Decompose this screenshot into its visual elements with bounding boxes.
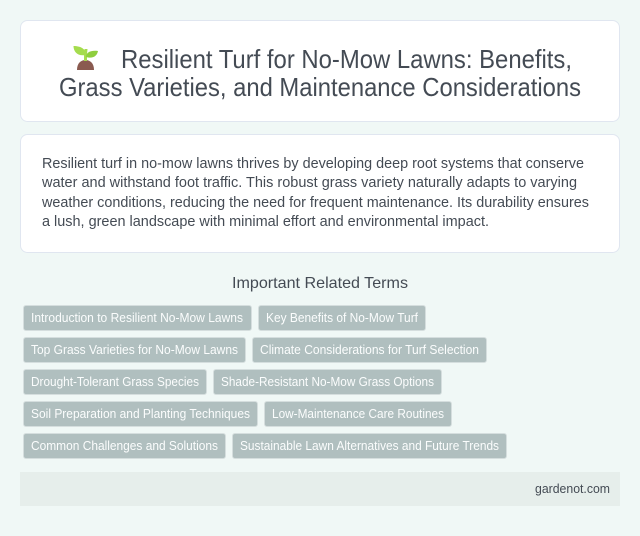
tag [258,306,426,330]
text block: description: weather conditions, reducing the need for frequent maintenance. Its durability ensures [41,194,589,211]
text block: description: Resilient turf in no-mow lawns thrives by developing deep root systems that conserve [42,155,584,172]
tag [264,402,452,426]
tag list [24,306,506,458]
text block: description: water and withstand foot traffic. This robust grass variety naturally adapts to varying [41,174,577,191]
tag [24,338,246,362]
tag [24,434,226,458]
tag: Shade-Resistant No-Mow Grass Options [221,375,434,389]
tag [214,370,442,394]
panel: title card [20,20,620,122]
tag [232,434,506,458]
title: Grass Varieties, and Maintenance Considerations [59,72,581,102]
footer [20,472,620,506]
title [59,44,581,102]
tag [24,402,258,426]
tag: Key Benefits of No-Mow Turf [266,311,418,325]
tag: Sustainable Lawn Alternatives and Future Trends [240,439,499,453]
heading: related terms: Important Related Terms [232,275,408,292]
tag: Introduction to Resilient No-Mow Lawns [31,311,243,325]
tag: Drought-Tolerant Grass Species [31,375,199,389]
tag: Climate Considerations for Turf Selection [260,343,479,357]
title: Resilient Turf for No-Mow Lawns: Benefits, [121,44,572,74]
text block: description: a lush, green landscape with minimal effort and environmental impact. [42,213,489,230]
tag: Low-Maintenance Care Routines [272,407,444,421]
tag [24,370,206,394]
footer: gardenot.com [535,481,610,496]
panel: description [20,134,620,252]
tag: Common Challenges and Solutions [31,439,218,453]
text block: description [41,155,589,230]
tag: Soil Preparation and Planting Techniques [31,407,250,421]
tag [252,338,486,362]
tag [24,306,252,330]
tag: Top Grass Varieties for No-Mow Lawns [31,343,238,357]
icon: seedling [74,46,98,70]
